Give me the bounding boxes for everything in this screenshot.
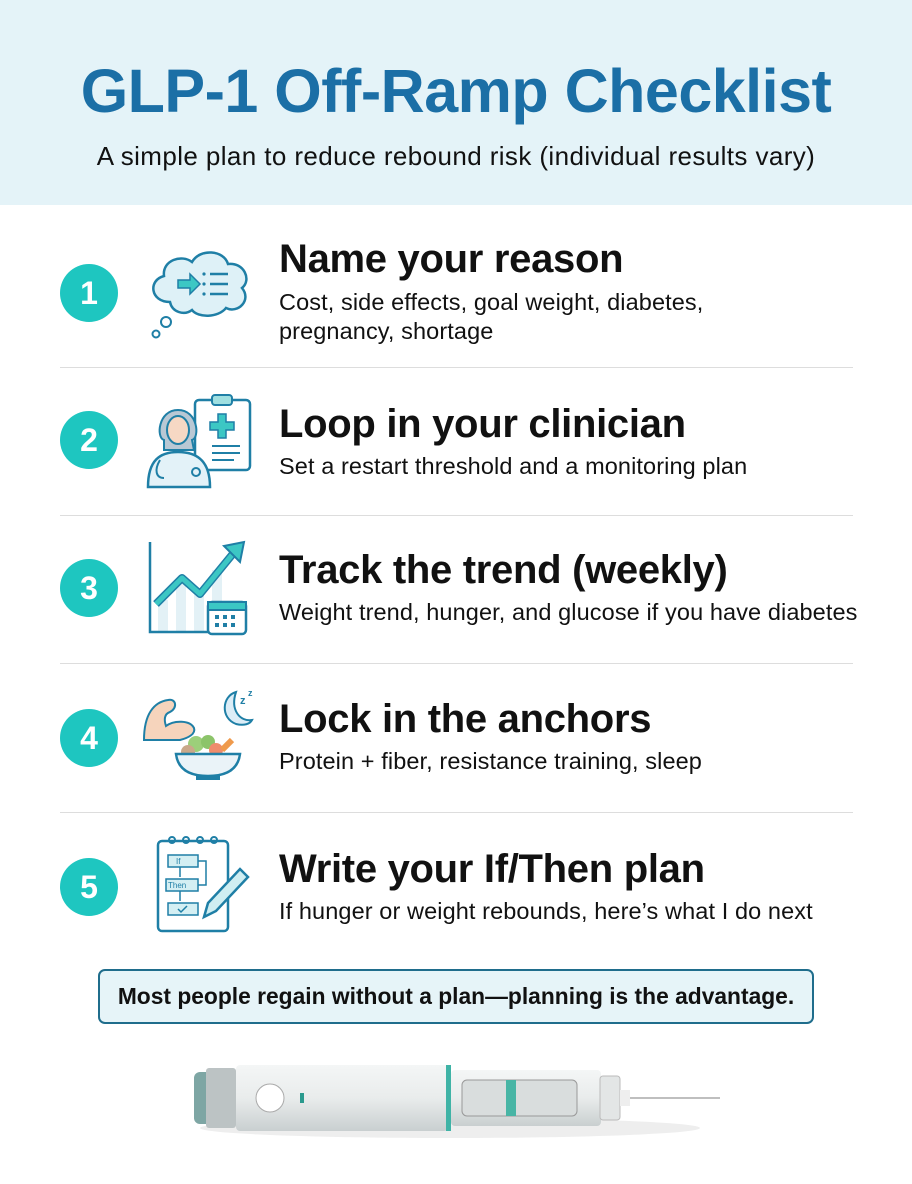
body 1 bbox=[279, 289, 703, 344]
heading 3: Track the trend (weekly) bbox=[279, 548, 728, 592]
body 3: Weight trend, hunger, and glucose if you have diabetes bbox=[279, 599, 858, 625]
step 3 bbox=[60, 540, 858, 636]
heading 4: Lock in the anchors bbox=[279, 697, 651, 741]
heading 1: Name your reason bbox=[279, 237, 623, 281]
body 1: pregnancy, shortage bbox=[279, 318, 493, 344]
step 5 bbox=[60, 836, 813, 932]
number 3: 3 bbox=[80, 570, 98, 606]
step 4 bbox=[60, 688, 702, 780]
number 2: 2 bbox=[80, 422, 98, 458]
number 4: 4 bbox=[80, 720, 98, 756]
callout bbox=[98, 969, 814, 1024]
number 4 bbox=[60, 709, 118, 767]
header band bbox=[0, 0, 912, 205]
icon: trend chart and calendar bbox=[148, 540, 248, 636]
icon: muscle, bowl, moon bbox=[143, 688, 254, 780]
step 1 bbox=[60, 237, 703, 344]
body 2: Set a restart threshold and a monitoring plan bbox=[279, 453, 747, 479]
icon: muscle, bowl, moon: z bbox=[248, 688, 253, 698]
callout: Most people regain without a plan—planning is the advantage. bbox=[118, 983, 794, 1009]
icon: thought cloud bbox=[152, 251, 248, 338]
icon: clinician with clipboard bbox=[146, 394, 252, 488]
icon: muscle, bowl, moon: z bbox=[240, 695, 246, 707]
number 1 bbox=[60, 264, 118, 322]
title: GLP-1 Off-Ramp Checklist bbox=[81, 57, 831, 125]
pen illustration bbox=[194, 1065, 720, 1138]
step 2 bbox=[60, 394, 747, 488]
number 5: 5 bbox=[80, 869, 98, 905]
body 4: Protein + fiber, resistance training, sleep bbox=[279, 748, 702, 774]
body 1: Cost, side effects, goal weight, diabetes, bbox=[279, 289, 703, 315]
body 5: If hunger or weight rebounds, here’s what I do next bbox=[279, 898, 813, 924]
number 1: 1 bbox=[80, 275, 98, 311]
subtitle: A simple plan to reduce rebound risk (individual results vary) bbox=[97, 141, 815, 171]
icon: if/then notepad with pen: If bbox=[176, 857, 181, 866]
number 2 bbox=[60, 411, 118, 469]
icon: if/then notepad with pen: Then bbox=[168, 881, 186, 890]
icon: if/then notepad with pen bbox=[156, 836, 250, 932]
heading 2: Loop in your clinician bbox=[279, 402, 686, 446]
number 3 bbox=[60, 559, 118, 617]
heading 5: Write your If/Then plan bbox=[279, 847, 705, 891]
number 5 bbox=[60, 858, 118, 916]
